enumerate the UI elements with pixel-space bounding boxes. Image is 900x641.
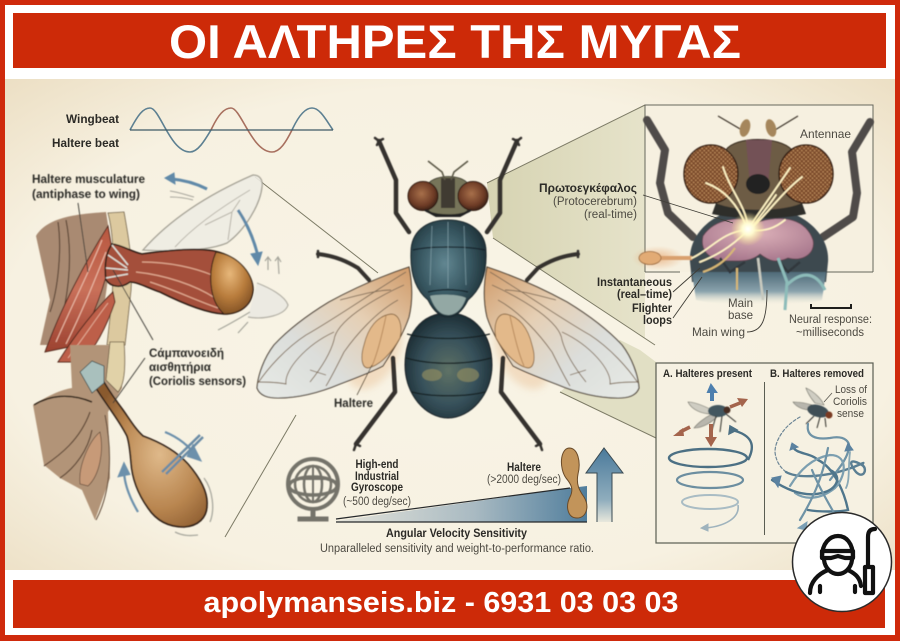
muscle bands [45, 226, 115, 362]
icon: gyroscope [288, 459, 338, 521]
wingbeat chart [52, 108, 333, 152]
icon: fly without halteres [793, 388, 832, 428]
thorax shell [690, 206, 828, 282]
flighter loops label: (real–time) [617, 289, 672, 301]
right wing and legs [482, 138, 639, 450]
head inset panel [539, 105, 873, 339]
antennae [718, 116, 798, 138]
scale bar [811, 304, 851, 308]
thorax fade [692, 272, 826, 304]
protocerebrum label [539, 181, 637, 221]
direction arrows [673, 385, 748, 447]
lower stalk and bulb [94, 382, 207, 527]
brain glow [731, 212, 765, 246]
protocerebrum label: (Protocerebrum) [553, 196, 637, 208]
head [408, 161, 488, 216]
protocerebrum label: (real-time) [584, 209, 637, 221]
haltere label: Haltere [334, 398, 373, 410]
gyroscope label: Gyroscope [351, 482, 403, 494]
title banner [13, 13, 886, 68]
title: ΟΙ ΑΛΤΗΡΕΣ ΤΗΣ ΜΥΓΑΣ [169, 15, 741, 68]
haltere leader [357, 365, 372, 395]
sensitivity caption: Unparalleled sensitivity and weight-to-performance ratio. [320, 543, 594, 555]
coriolis label: sense [837, 408, 864, 420]
contact line: apolymanseis.biz - 6931 03 03 03 [204, 587, 678, 619]
abdomen [405, 313, 492, 418]
main base label [728, 296, 753, 322]
inset leaders [643, 195, 767, 332]
neural response label: Neural response: [789, 314, 872, 326]
coriolis label [833, 384, 868, 420]
flighter loops label: Flighter [632, 303, 672, 315]
small motion arrows [119, 432, 213, 536]
neural response label [789, 314, 872, 339]
antiphase label: (antiphase to wing) [32, 187, 140, 201]
sensors label: (Coriolis sensors) [149, 374, 246, 388]
panel A: halteres present [663, 368, 752, 531]
thorax [411, 220, 486, 317]
wing phase curve [130, 108, 211, 152]
icon: pest control technician badge [792, 512, 892, 612]
zoom wedge to flight inset [560, 340, 656, 438]
haltere stalk and bulb [105, 244, 253, 314]
left wing and legs [257, 138, 414, 450]
gyroscope label [343, 459, 411, 508]
main base label: Main [728, 296, 753, 310]
flighter loops label [597, 277, 672, 327]
coriolis label: Loss of [835, 384, 868, 396]
left anatomy: upper haltere [32, 172, 288, 362]
inset border [645, 105, 873, 272]
sensitivity heading: Angular Velocity Sensitivity [386, 526, 527, 540]
haltere rate label [487, 462, 561, 486]
protocerebrum label: Πρωτοεγκέφαλος [539, 181, 637, 195]
central fly [257, 138, 639, 450]
up arrow [586, 448, 623, 522]
ghost wing [143, 175, 288, 318]
panel B: halteres removed [770, 368, 868, 530]
inset legs [647, 120, 870, 237]
tissue [36, 212, 112, 345]
coriolis label: Coriolis [833, 396, 867, 408]
icon: fly with halteres [688, 402, 736, 432]
haltere beat label: Haltere beat [52, 136, 119, 150]
neural response label: ~milliseconds [796, 327, 864, 339]
antennae label: Antennae [800, 127, 851, 141]
footer banner [13, 580, 885, 628]
musculature label: Haltere musculature [32, 172, 145, 186]
leader [113, 358, 145, 403]
heading A: A. Halteres present [663, 368, 752, 380]
flight comparison inset [656, 363, 873, 543]
head capsule [716, 140, 802, 212]
wingbeat label: Wingbeat [66, 112, 119, 126]
haltere rate label: Haltere [507, 462, 541, 474]
gyroscope label: Industrial [355, 471, 399, 483]
sensors label: αισθητήρια [149, 360, 212, 374]
gyroscope vs haltere comparison [288, 448, 623, 555]
icon: small haltere [561, 448, 587, 518]
sensors label: Cάμπανοειδή [149, 346, 224, 360]
teal and pale nerves [778, 258, 825, 310]
motion arrows [165, 173, 281, 333]
flighter loops label: Instantaneous [597, 277, 672, 289]
zoom wedge to head inset [225, 105, 655, 537]
main wing label: Main wing [692, 325, 745, 339]
tangled flight path [772, 417, 865, 530]
heading B: B. Halteres removed [770, 368, 864, 380]
compound eyes [684, 145, 738, 203]
haltere rate label: (>2000 deg/sec) [487, 474, 561, 486]
haltere phase curve [211, 108, 292, 152]
lower tissue [33, 345, 122, 520]
main base label: base [728, 308, 753, 322]
gyroscope label: High-end [356, 459, 398, 471]
brain [702, 219, 813, 261]
sensors label [149, 346, 246, 388]
gyroscope label: (~500 deg/sec) [343, 496, 411, 508]
spiral flight path [669, 426, 752, 531]
sensitivity wedge [336, 486, 587, 522]
coriolis leader [824, 393, 832, 402]
glowing nerves [692, 167, 802, 262]
parchment background [5, 79, 895, 570]
leaders [78, 203, 153, 340]
left anatomy: lower haltere [33, 342, 246, 536]
flighter loops label: loops [643, 315, 672, 327]
small haltere [632, 246, 692, 270]
